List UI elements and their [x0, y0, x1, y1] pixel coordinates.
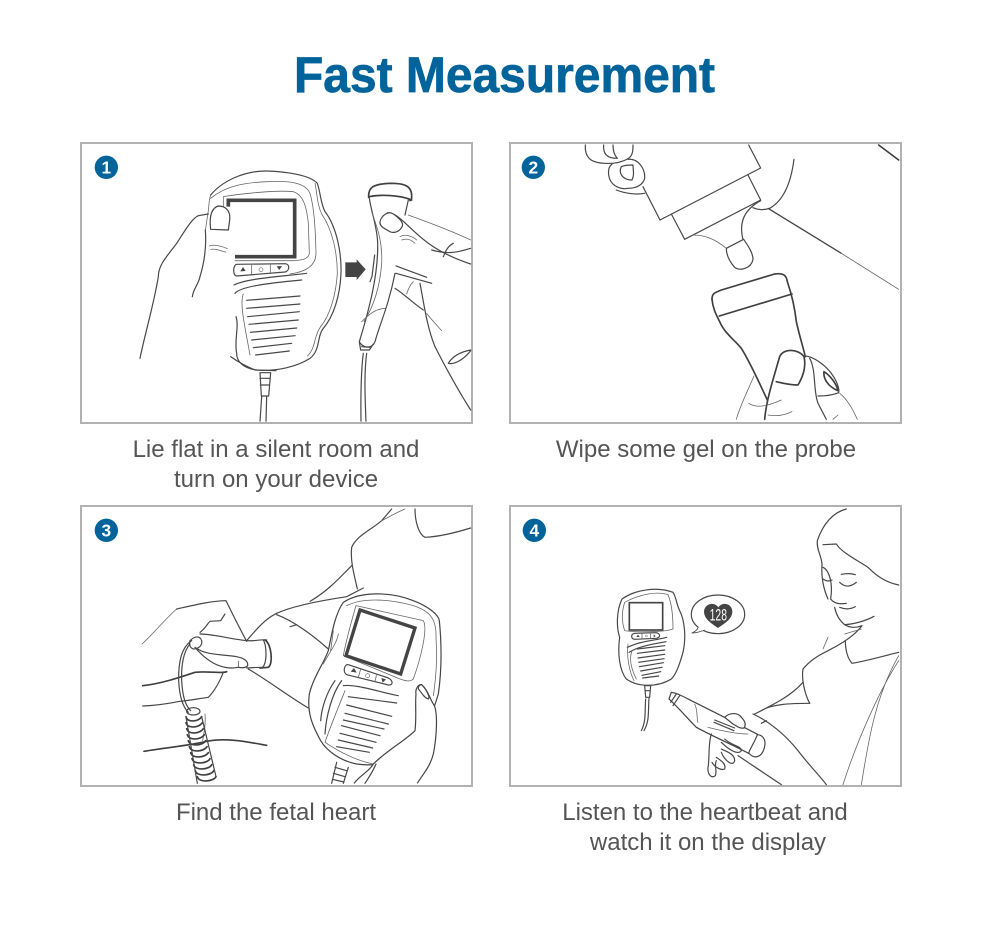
icon: monitor device	[205, 171, 341, 422]
badge: number 1: 1	[102, 157, 112, 177]
icon: probe and right hand	[359, 183, 471, 422]
badge: number 3: 3	[102, 520, 112, 540]
badge: number 2: 2	[529, 157, 538, 177]
caption: step 4: Listen to the heartbeat and	[562, 799, 848, 826]
icon: probe head	[712, 274, 805, 400]
badge: number 3	[95, 519, 118, 542]
icon: coiled cable	[179, 641, 216, 783]
panel: step 2 frame	[510, 143, 901, 423]
illustration: step 3	[95, 509, 471, 783]
panel: step 1 frame	[81, 143, 472, 423]
caption: step 3: Find the fetal heart	[176, 799, 376, 826]
icon: small monitor device	[617, 589, 685, 731]
icon: hand holding probe	[736, 350, 857, 419]
icon: torso outline	[247, 509, 471, 708]
icon: gel tube	[643, 145, 761, 269]
caption: step 4: watch it on the display	[589, 829, 826, 856]
caption: step 1: Lie flat in a silent room and	[133, 436, 419, 463]
title: Fast Measurement	[294, 47, 715, 103]
caption: step 1: turn on your device	[174, 466, 378, 493]
icon: woman figure	[753, 509, 899, 785]
callout: speech bubble with heart rate	[691, 595, 745, 634]
badge: number 2	[522, 156, 545, 179]
panel: step 4 frame	[510, 506, 901, 786]
badge: number 1	[95, 156, 118, 179]
illustration: step 4	[523, 509, 899, 785]
badge: number 4	[523, 519, 546, 542]
illustration: step 1	[95, 156, 471, 422]
icon: probe in hand	[669, 692, 781, 785]
arrow	[345, 259, 366, 280]
illustration: step 2	[522, 145, 899, 419]
callout: speech bubble with heart rate: 128	[710, 605, 727, 624]
icon: monitor device	[309, 594, 441, 783]
badge: number 4: 4	[530, 520, 540, 540]
panel: step 3 frame	[81, 506, 472, 786]
icon: hand holding device	[354, 685, 436, 783]
icon: left hand	[140, 206, 230, 358]
icon: hand holding tube	[585, 145, 899, 289]
caption: step 2: Wipe some gel on the probe	[556, 436, 856, 463]
icon: hand holding probe	[142, 601, 271, 751]
